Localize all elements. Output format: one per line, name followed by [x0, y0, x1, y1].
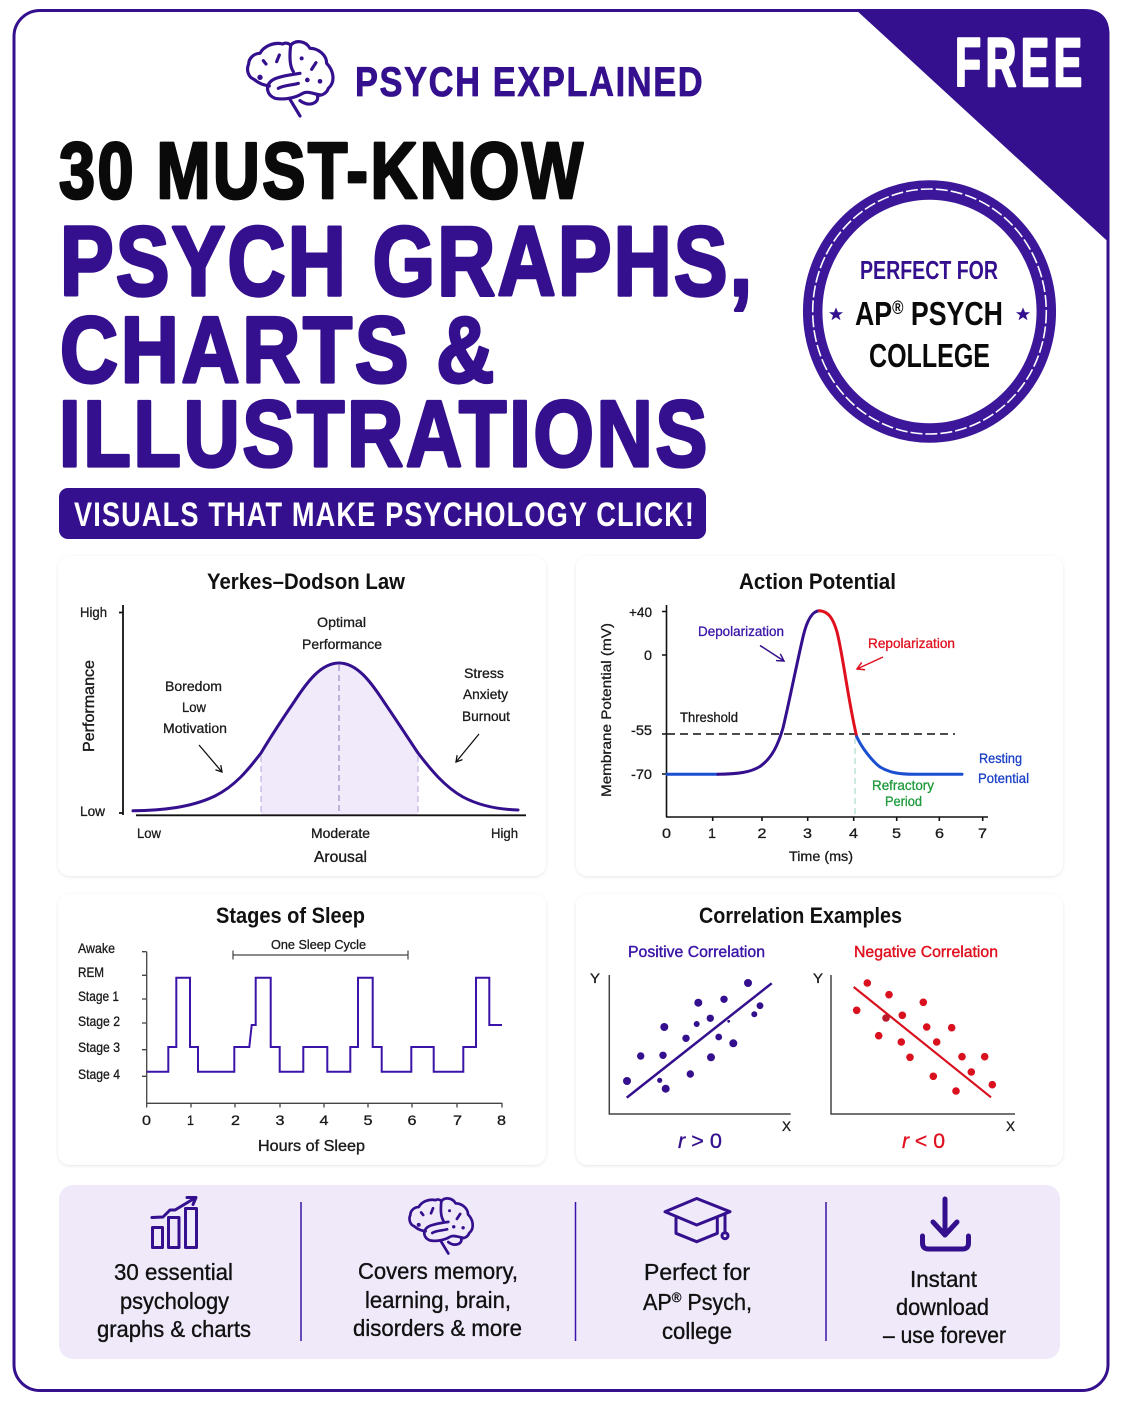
feature: topics covered: disorders & more: [353, 1315, 522, 1341]
axis and callout labels: Low: [137, 825, 162, 841]
labels: 3: [276, 1112, 285, 1128]
axis and callout labels: Boredom: [165, 678, 222, 694]
badge: perfect for: AP: [855, 295, 901, 332]
positive scatter plot: X: [782, 1118, 792, 1134]
curve: [133, 663, 518, 811]
labels: 4: [320, 1112, 329, 1128]
feature: audience: college: [662, 1318, 732, 1344]
axis and callout labels: Arousal: [314, 849, 367, 866]
negative scatter plot: X: [1006, 1118, 1016, 1134]
icon: brain: [410, 1198, 473, 1253]
labels: Stage 2: [78, 1013, 120, 1029]
threshold line: [667, 733, 955, 735]
icon: graduation cap: [665, 1198, 730, 1242]
labels: -55: [631, 722, 652, 738]
feature: audience: ®: [672, 1289, 682, 1305]
axes: [119, 605, 526, 815]
panel: Yerkes-Dodson Law: [58, 556, 546, 876]
optimal zone shading: [261, 663, 418, 815]
headline: CHARTS &: [60, 298, 494, 402]
feature: audience: Perfect for: [644, 1259, 750, 1285]
bracket: one sleep cycle: [233, 937, 408, 960]
labels: 4: [849, 825, 858, 841]
labels: Stage 1: [78, 988, 119, 1004]
badge: perfect for: COLLEGE: [869, 337, 990, 374]
labels: Hours of Sleep: [258, 1138, 365, 1155]
labels: Stage 3: [78, 1039, 120, 1055]
labels: Resting: [979, 750, 1022, 766]
feature: 30 essential graphs: psychology: [120, 1288, 229, 1314]
heading: Stages of Sleep: [216, 903, 365, 928]
badge: perfect for: [813, 189, 1046, 434]
feature: topics covered: [353, 1198, 522, 1341]
labels: 3: [803, 825, 812, 841]
axis and callout labels: Burnout: [462, 708, 510, 724]
corner ribbon: FREE: FREE: [955, 25, 1082, 102]
arrows: [760, 646, 883, 669]
sleep stage trace: [147, 978, 502, 1072]
badge: perfect for: ®: [892, 298, 903, 319]
labels: 6: [935, 825, 944, 841]
feature: audience: Psych,: [681, 1289, 752, 1315]
labels: 2: [231, 1112, 240, 1128]
labels: [598, 604, 1029, 864]
labels: Stage 4: [78, 1066, 120, 1082]
badge: perfect for: PERFECT FOR: [860, 255, 998, 285]
action potential curve: [667, 611, 962, 774]
icon: brain: [248, 42, 333, 116]
heading: Action Potential: [739, 569, 896, 594]
feature: topics covered: Covers memory,: [358, 1258, 518, 1284]
labels: +40: [629, 604, 652, 620]
positive scatter plot: Y: [590, 970, 601, 986]
labels: Repolarization: [868, 635, 955, 651]
logo: brain icon and brand name: PSYCH EXPLAINED: [355, 59, 703, 106]
feature: instant download: Instant: [910, 1266, 978, 1292]
labels: 7: [978, 825, 987, 841]
labels: 0: [644, 647, 652, 663]
axis and callout labels: Performance: [302, 636, 382, 652]
axis and callout labels: Low: [182, 699, 207, 715]
panel: Action Potential: [576, 556, 1063, 876]
axis and callout labels: Moderate: [311, 825, 370, 841]
labels: 1: [187, 1112, 194, 1128]
axis and callout labels: [80, 604, 518, 866]
labels: 2: [758, 825, 767, 841]
labels: [78, 940, 506, 1155]
feature: instant download: [883, 1199, 1006, 1348]
labels: 7: [453, 1112, 462, 1128]
refractory marker: [854, 738, 856, 817]
positive scatter plot: [590, 944, 792, 1153]
labels: 5: [892, 825, 901, 841]
feature: 30 essential graphs: 30 essential: [114, 1259, 233, 1285]
negative scatter plot: [813, 944, 1016, 1153]
labels: Refractory: [872, 777, 934, 793]
axis and callout labels: High: [80, 604, 107, 620]
feature: audience: AP: [643, 1289, 674, 1315]
panel: feature strip: [59, 1185, 1060, 1359]
labels: Membrane Potential (mV): [598, 623, 614, 797]
positive scatter plot: r > 0: [678, 1130, 722, 1153]
feature: topics covered: learning, brain,: [365, 1287, 511, 1313]
headline: ILLUSTRATIONS: [59, 382, 707, 487]
labels: 5: [364, 1112, 373, 1128]
labels: Potential: [978, 770, 1029, 786]
feature: instant download: download: [896, 1294, 989, 1320]
logo: brain icon and brand name: [248, 42, 703, 116]
axis and callout labels: Stress: [464, 665, 504, 681]
corner ribbon: FREE: [855, 9, 1110, 243]
axes: [142, 952, 502, 1108]
axis and callout labels: High: [491, 825, 518, 841]
badge: perfect for: PSYCH: [903, 295, 1003, 332]
labels: 1: [708, 825, 716, 841]
heading: Correlation Examples: [699, 903, 902, 928]
labels: REM: [78, 964, 104, 980]
heading: Yerkes–Dodson Law: [207, 569, 406, 594]
positive scatter plot: Positive Correlation: [628, 944, 765, 961]
feature: 30 essential graphs: graphs & charts: [97, 1316, 251, 1342]
axis and callout labels: Anxiety: [463, 686, 508, 702]
axes: [662, 605, 988, 821]
axis and callout labels: Motivation: [163, 720, 227, 736]
labels: Time (ms): [789, 848, 853, 864]
bracket: one sleep cycle: One Sleep Cycle: [271, 937, 366, 952]
headline: 30 MUST-KNOW: [59, 127, 583, 216]
arrows: [199, 734, 479, 772]
axis and callout labels: Performance: [81, 660, 98, 752]
negative scatter plot: Y: [813, 970, 824, 986]
labels: Threshold: [680, 709, 738, 725]
headline: PSYCH GRAPHS,: [60, 206, 752, 316]
axis and callout labels: Low: [80, 803, 106, 819]
feature: instant download: – use forever: [883, 1322, 1006, 1348]
negative scatter plot: r < 0: [902, 1130, 945, 1153]
panel: Stages of Sleep: [58, 894, 546, 1165]
panel: Correlation Examples: [576, 894, 1063, 1165]
labels: Depolarization: [698, 623, 784, 639]
icon: download arrow: [922, 1199, 968, 1249]
subtitle banner: VISUALS THAT MAKE PSYCHOLOGY CLICK!: [74, 495, 694, 534]
labels: -70: [631, 766, 652, 782]
negative scatter plot: Negative Correlation: [854, 944, 998, 961]
labels: 6: [408, 1112, 417, 1128]
labels: 0: [142, 1112, 151, 1128]
labels: 8: [497, 1112, 506, 1128]
feature: audience: [643, 1198, 752, 1344]
icon: rising bar chart: [152, 1198, 196, 1248]
labels: Period: [885, 793, 922, 809]
labels: Awake: [78, 940, 115, 956]
labels: 0: [662, 825, 671, 841]
feature: 30 essential graphs: [97, 1198, 251, 1342]
axis and callout labels: Optimal: [317, 614, 366, 630]
headline: [59, 127, 752, 487]
